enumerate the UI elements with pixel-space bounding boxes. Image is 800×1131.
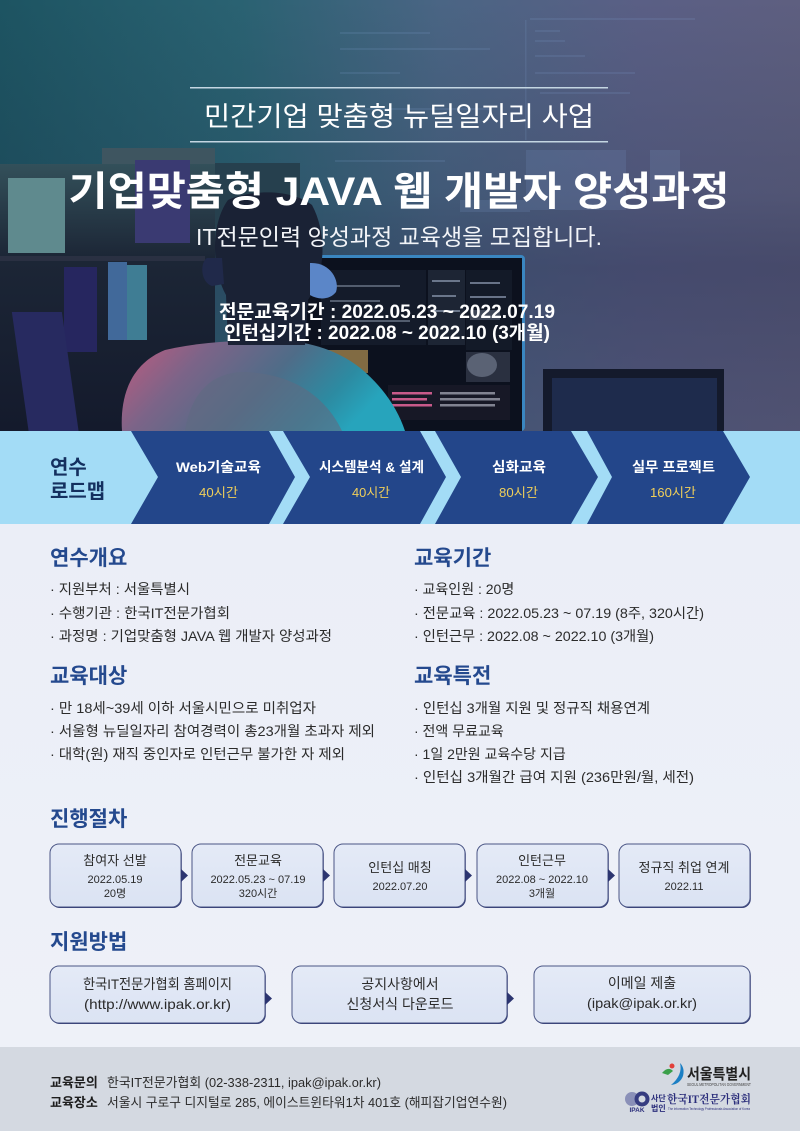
developer silhouette: [122, 192, 405, 431]
step: 정규직 취업 연계: 정규직 취업 연계: [639, 860, 729, 875]
panel: 연수개요: · 지원부처 : 서울특별시: [50, 581, 190, 597]
step: 정규직 취업 연계: [619, 844, 751, 908]
tagline: IT전문인력 양성과정 교육생을 모집합니다.: [196, 224, 602, 250]
step 2: [283, 431, 446, 524]
contact info: [50, 1075, 507, 1110]
panel: 교육특전: 교육특전: [414, 665, 491, 688]
panel: 교육대상: · 대학(원) 재직 중인자로 인턴근무 불가한 자 제외: [50, 746, 345, 762]
training dates: 전문교육기간 : 2022.05.23 ~ 2022.07.19: [219, 301, 555, 323]
panel: 교육기간: · 교육인원 : 20명: [414, 581, 514, 597]
roadmap label: 연수: [50, 456, 87, 479]
logo: IPAK: 사단: [651, 1093, 666, 1103]
step: 전문교육: 320시간: [239, 887, 277, 900]
step: 인턴근무: [477, 844, 615, 908]
body background: [0, 524, 800, 1048]
method: homepage: (http://www.ipak.or.kr): [84, 996, 231, 1012]
method: email: [534, 966, 751, 1024]
panel: 교육대상: [50, 665, 375, 762]
logo: IPAK: [625, 1092, 751, 1114]
monitor: [290, 255, 525, 431]
step 1: Web기술교육: [176, 459, 261, 475]
internship dates: 인턴십기간 : 2022.08 ~ 2022.10 (3개월): [224, 322, 550, 344]
method: download: 신청서식 다운로드: [347, 996, 454, 1012]
step 3: 80시간: [499, 485, 538, 500]
step: 인턴십 매칭: [334, 844, 472, 908]
roadmap label: 로드맵: [50, 480, 105, 503]
step: 인턴십 매칭: 2022.07.20: [372, 881, 428, 893]
panel: 교육특전: · 인턴십 3개월간 급여 지원 (236만원/월, 세전): [414, 769, 694, 785]
hero photo background: [0, 0, 800, 431]
step: 전문교육: 2022.05.23 ~ 07.19: [210, 874, 306, 886]
panel: 교육대상: · 서울형 뉴딜일자리 참여경력이 총23개월 초과자 제외: [50, 723, 375, 739]
panel: 교육기간: · 인턴근무 : 2022.08 ~ 2022.10 (3개월): [414, 628, 654, 644]
heading: 지원방법: [50, 931, 127, 954]
panel: 진행절차: [50, 808, 751, 908]
logo: IPAK: The Information Technology Professionals Association of Korea: [668, 1106, 751, 1111]
logo: IPAK: IPAK: [629, 1107, 645, 1114]
contact info: 교육문의: [50, 1075, 98, 1090]
roadmap band: [0, 431, 800, 524]
panel: 연수개요: 연수개요: [50, 547, 127, 570]
panel: 교육기간: 교육기간: [414, 547, 491, 570]
method: homepage: [50, 966, 272, 1024]
subtitle rules: [190, 87, 608, 142]
contact info: 교육장소: [50, 1095, 98, 1110]
step 1: 40시간: [199, 485, 238, 500]
panel: 교육특전: · 인턴십 3개월 지원 및 정규직 채용연계: [414, 700, 650, 716]
panel: 교육기간: · 전문교육 : 2022.05.23 ~ 07.19 (8주, 320시간): [414, 605, 704, 621]
roadmap label: [50, 456, 105, 503]
panel: 교육대상: · 만 18세~39세 이하 서울시민으로 미취업자: [50, 700, 316, 716]
panel: 지원방법: [50, 931, 751, 1024]
method: homepage: 한국IT전문가협회 홈페이지: [83, 976, 232, 992]
contact info: 한국IT전문가협회 (02-338-2311, ipak@ipak.or.kr): [107, 1075, 381, 1090]
subtitle: 민간기업 맞춤형 뉴딜일자리 사업: [204, 102, 594, 132]
panel: 연수개요: · 과정명 : 기업맞춤형 JAVA 웹 개발자 양성과정: [50, 628, 332, 644]
panel: 연수개요: [50, 547, 332, 644]
panel: 교육특전: · 1일 2만원 교육수당 지급: [414, 746, 566, 762]
step: 참여자 선발: 2022.05.19: [87, 874, 143, 886]
faint code overlay: [335, 18, 695, 212]
panel: 교육특전: [414, 665, 694, 785]
step: 전문교육: [192, 844, 330, 908]
step 3: [435, 431, 598, 524]
step: 참여자 선발: [50, 844, 188, 908]
method: download: [292, 966, 514, 1024]
step: 인턴근무: 인턴근무: [518, 853, 566, 868]
step 1: [131, 431, 295, 524]
step 2: 40시간: [352, 485, 390, 500]
logo: IPAK: 한국IT전문가협회: [667, 1092, 751, 1106]
headline block: [68, 87, 730, 344]
logo: Seoul: [662, 1063, 751, 1087]
contact info: 서울시 구로구 디지털로 285, 에이스트윈타워1차 401호 (해피잡기업연수원): [107, 1095, 507, 1110]
method: download: 공지사항에서: [361, 976, 439, 992]
step: 인턴근무: 3개월: [529, 887, 555, 900]
logo: Seoul: SEOUL METROPOLITAN GOVERNMENT: [687, 1082, 751, 1087]
step 4: 160시간: [650, 485, 696, 500]
step: 참여자 선발: 참여자 선발: [83, 853, 147, 868]
step: 전문교육: 전문교육: [234, 853, 282, 868]
panel: 연수개요: · 수행기관 : 한국IT전문가협회: [50, 605, 230, 621]
step: 정규직 취업 연계: 2022.11: [665, 881, 703, 893]
step 2: 시스템분석 & 설계: [319, 459, 424, 475]
step: 참여자 선발: 20명: [104, 887, 126, 900]
step 3: 심화교육: [492, 459, 546, 475]
footer: [0, 1047, 800, 1131]
main title: 기업맞춤형 JAVA 웹 개발자 양성과정: [68, 170, 730, 214]
heading: 진행절차: [50, 808, 127, 831]
logo: IPAK: 법인: [651, 1103, 666, 1113]
second monitor: [543, 369, 724, 431]
step 4: [587, 431, 750, 524]
panel: 교육특전: · 전액 무료교육: [414, 723, 504, 739]
bookshelf: [0, 148, 300, 431]
method: email: 이메일 제출: [608, 975, 676, 991]
logo: Seoul: 서울특별시: [687, 1066, 751, 1083]
step: 인턴십 매칭: 인턴십 매칭: [368, 860, 432, 875]
step 4: 실무 프로젝트: [632, 459, 715, 475]
panel: 교육대상: 교육대상: [50, 665, 127, 688]
step: 인턴근무: 2022.08 ~ 2022.10: [496, 874, 588, 886]
panel: 교육기간: [414, 547, 704, 644]
method: email: (ipak@ipak.or.kr): [587, 995, 697, 1011]
